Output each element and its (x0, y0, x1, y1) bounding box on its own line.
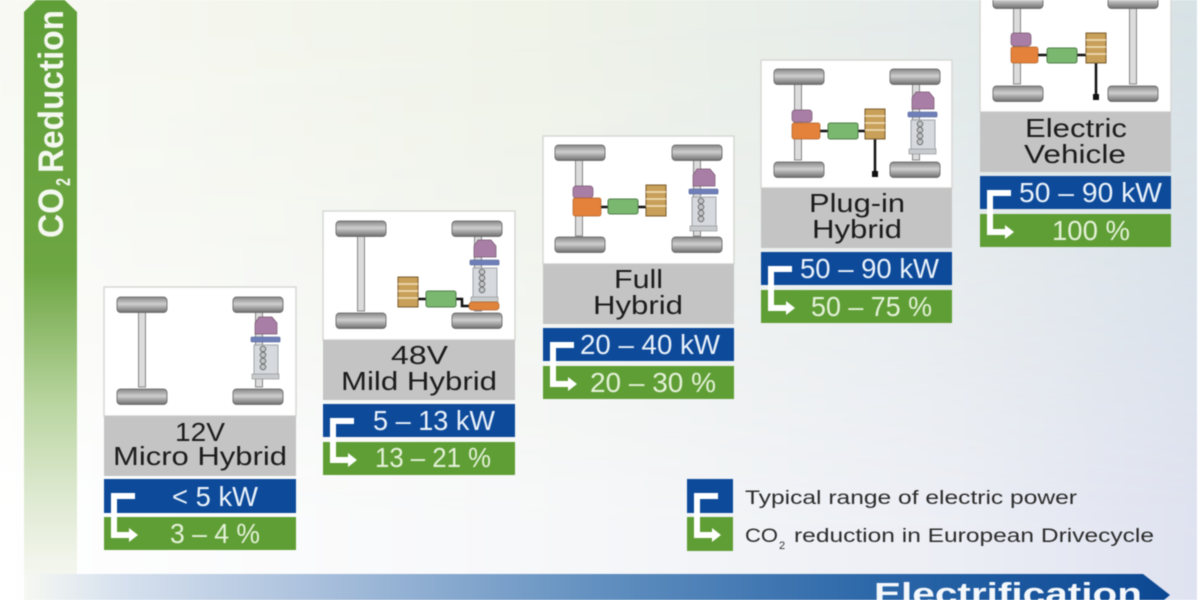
name: Micro Hybrid (113, 441, 287, 471)
CO2 reduction (980, 214, 1171, 247)
name: Hybrid (812, 214, 902, 244)
axis label: CO2 Reduction (32, 10, 75, 238)
drivetrain diagram (104, 287, 296, 416)
name (761, 188, 952, 248)
legend text: electric power: Typical range of electric power (745, 488, 1078, 509)
CO2 reduction: 100 % (1052, 215, 1130, 246)
electric power (980, 176, 1171, 209)
electric power (323, 404, 515, 437)
bracket arrow (553, 345, 577, 391)
axis label: CO2 Reduction: 2 (53, 178, 75, 186)
axis label: CO2 Reduction: Reduction (32, 10, 71, 173)
legend text: CO2 reduction (745, 526, 1154, 552)
CO2 reduction (543, 366, 734, 399)
bracket arrow (990, 193, 1014, 239)
electric power: 50 – 90 kW (1019, 177, 1163, 208)
panel: 12V Micro Hybrid (104, 287, 296, 550)
arrow: CO2 reduction axis (24, 0, 77, 600)
name: Vehicle (1024, 139, 1126, 169)
CO2 reduction: 3 – 4 % (170, 518, 260, 549)
panel: Plug-in Hybrid (761, 60, 952, 323)
name: Electric (1025, 113, 1127, 143)
electric power: 20 – 40 kW (580, 329, 721, 360)
electric power: 50 – 90 kW (800, 253, 940, 284)
axis label: CO2 Reduction: CO (32, 188, 71, 238)
drivetrain diagram (980, 0, 1171, 112)
name: 48V (391, 340, 449, 370)
name: Hybrid (593, 290, 683, 320)
CO2 reduction (761, 290, 952, 323)
name: Mild Hybrid (341, 366, 497, 396)
legend text: CO2 reduction: 2 (779, 540, 785, 552)
drivetrain diagram (543, 136, 734, 264)
CO2 reduction: 13 – 21 % (375, 442, 491, 473)
name (980, 112, 1171, 172)
CO2 reduction (104, 517, 296, 550)
name: Plug-in (809, 188, 905, 218)
arrow: electrification axis (24, 574, 1170, 600)
legend text: CO2 reduction: reduction in European Drivecycle (794, 526, 1154, 547)
electric power (104, 479, 296, 513)
name: Full (614, 264, 663, 294)
CO2 reduction: 20 – 30 % (590, 367, 716, 398)
bracket arrow (333, 421, 357, 467)
drivetrain diagram (761, 60, 952, 188)
electric power: < 5 kW (172, 481, 259, 512)
name (323, 340, 515, 400)
bracket arrow (114, 496, 138, 542)
panel: 48V Mild Hybrid (323, 211, 515, 475)
legend (687, 479, 1154, 552)
panel: Electric Vehicle (980, 0, 1171, 247)
CO2 reduction (323, 442, 515, 475)
name: 12V (175, 417, 226, 447)
bracket arrow (771, 269, 795, 315)
electric power (543, 328, 734, 361)
electric power (761, 252, 952, 285)
name (543, 264, 734, 324)
legend text: CO2 reduction: CO (745, 526, 778, 547)
drivetrain diagram (323, 211, 515, 340)
panel: Full Hybrid (543, 136, 734, 399)
CO2 reduction: 50 – 75 % (811, 291, 932, 322)
legend icon (687, 479, 733, 551)
name (104, 416, 296, 476)
electric power: 5 – 13 kW (373, 405, 496, 436)
